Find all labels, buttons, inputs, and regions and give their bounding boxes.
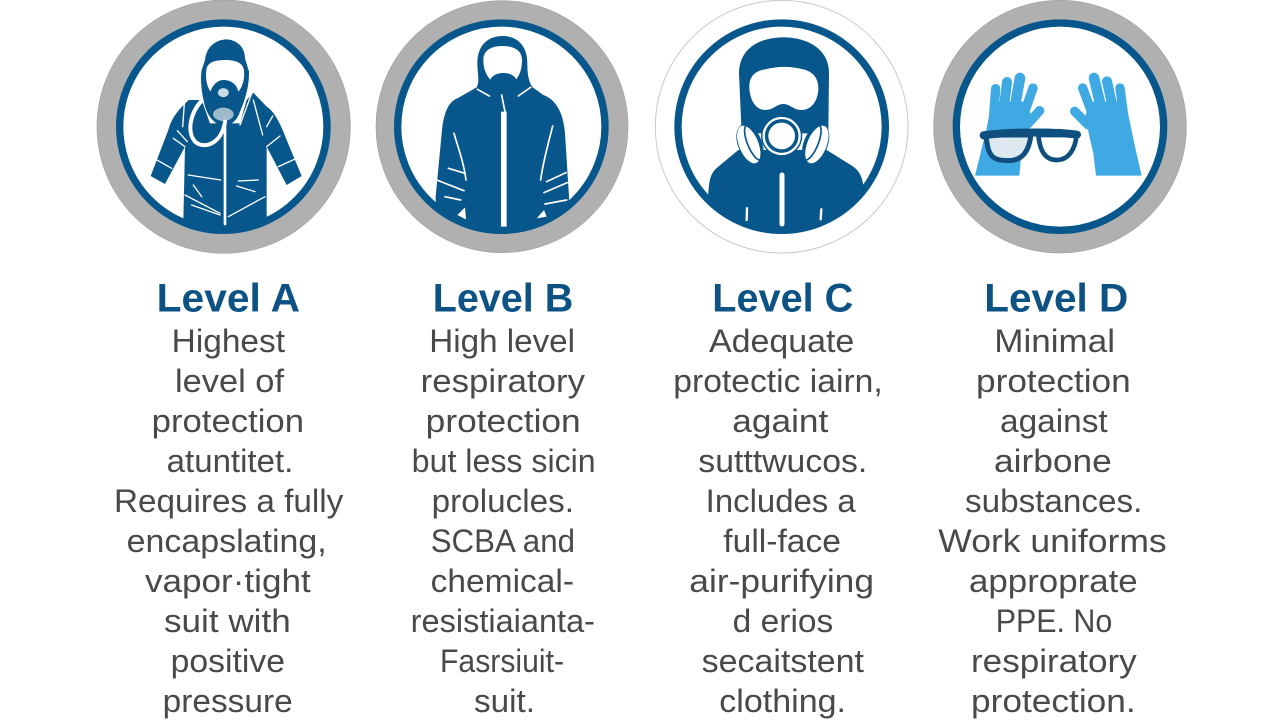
body text: Level B: chemical- xyxy=(431,563,574,599)
heading: Level D: Level D xyxy=(984,276,1128,320)
body text: Level B: but less sicin xyxy=(412,443,596,479)
body text: Level A: pressure xyxy=(163,683,293,719)
body text: Level B: Fasrsiuit- xyxy=(440,643,564,679)
body text: Level C xyxy=(673,323,883,719)
body text: Level B: SCBA and xyxy=(431,523,575,559)
body text: Level A: suit with xyxy=(164,603,291,639)
panel: Level D xyxy=(934,0,1186,719)
body text: Level B: protection xyxy=(426,403,581,439)
body text: Level A: atuntitet. xyxy=(167,443,293,479)
body text: Level D: PPE. No xyxy=(996,603,1112,639)
body text: Level B: respiratory xyxy=(421,363,585,399)
body text: Level C: air-purifying xyxy=(689,563,874,599)
body text: Level A: positive xyxy=(171,643,285,679)
body text: Level A xyxy=(114,323,343,719)
body text: Level C: Adequate xyxy=(709,323,854,359)
heading: Level A: Level A xyxy=(157,276,300,320)
icon: fully encapsulated suit with mask xyxy=(97,0,350,253)
body text: Level D: airbone xyxy=(994,443,1112,479)
body text: Level A: vapor·tight xyxy=(145,563,311,599)
heading: Level C: Level C xyxy=(712,276,853,320)
body text: Level D: protection xyxy=(976,363,1131,399)
body text: Level D: substances. xyxy=(965,483,1142,519)
body text: Level D xyxy=(938,323,1167,719)
body text: Level D: against xyxy=(1000,403,1108,439)
panel: Level A xyxy=(97,0,350,719)
body text: Level A: level of xyxy=(175,363,284,399)
body text: Level D: Work uniforms xyxy=(938,523,1167,559)
heading: Level B: Level B xyxy=(433,276,573,320)
body text: Level D: approprate xyxy=(969,563,1138,599)
body text: Level C: full-face xyxy=(723,523,841,559)
panel: Level B xyxy=(376,1,628,719)
body text: Level B: prolucles. xyxy=(432,483,574,519)
body text: Level B: suit. xyxy=(474,683,535,719)
body text: Level A: Requires a fully xyxy=(114,483,343,519)
icon: gloves and safety glasses xyxy=(934,0,1186,253)
body text: Level C: clothing. xyxy=(719,683,846,719)
body text: Level A: encapslating, xyxy=(127,523,327,559)
body text: Level A: Highest xyxy=(172,323,285,359)
body text: Level D: respiratory xyxy=(971,643,1137,679)
body text: Level D: protection. xyxy=(971,683,1136,719)
icon: full-face air-purifying respirator xyxy=(655,0,908,253)
body text: Level D: Minimal xyxy=(994,323,1115,359)
body text: Level C: againt xyxy=(732,403,828,439)
body text: Level A: protection xyxy=(152,403,304,439)
body text: Level C: d erios xyxy=(733,603,833,639)
icon: hooded jacket with respirator xyxy=(376,1,628,253)
body text: Level C: secaitstent xyxy=(702,643,864,679)
body text: Level C: sutttwucos. xyxy=(698,443,867,479)
panel: Level C xyxy=(655,0,908,719)
body text: Level B: resistiaianta- xyxy=(411,603,595,639)
body text: Level B xyxy=(411,323,596,719)
body text: Level C: protectic iairn, xyxy=(673,363,883,399)
body text: Level B: High level xyxy=(429,323,575,359)
body text: Level C: Includes a xyxy=(706,483,856,519)
